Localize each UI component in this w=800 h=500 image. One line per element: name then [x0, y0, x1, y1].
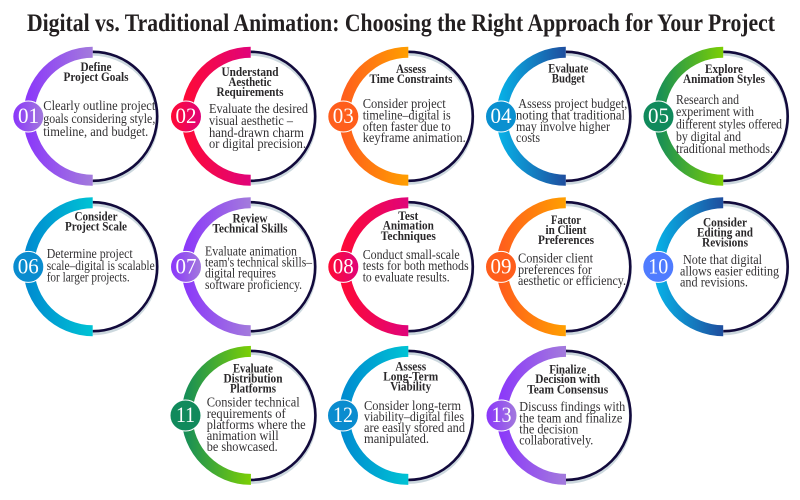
- heading: Finalize: [549, 362, 587, 376]
- body text: [364, 398, 465, 446]
- heading: [65, 210, 128, 234]
- heading: [64, 60, 129, 84]
- body text: Evaluate animation: [205, 244, 297, 259]
- body text: timeline–digital is: [363, 108, 451, 122]
- body text: or digital precision.: [209, 136, 306, 151]
- heading: Evaluate: [548, 62, 589, 76]
- heading: Explore: [705, 62, 744, 76]
- heading: Aesthetic: [228, 75, 272, 89]
- heading: Consider: [703, 216, 748, 230]
- badge 01: 01: [18, 103, 39, 128]
- panel: step 06 project scale: [13, 197, 157, 336]
- body text: hand-drawn charm: [209, 125, 305, 140]
- badge 07: 07: [176, 254, 196, 278]
- body text: the team and finalize: [519, 410, 622, 425]
- heading: Assess: [396, 62, 426, 76]
- panel: step 05 animation styles: [643, 47, 788, 186]
- body text: Evaluate the desired: [209, 101, 308, 116]
- body text: team's technical skills–: [205, 255, 312, 270]
- heading: Define: [80, 60, 112, 74]
- heading: Long-Term: [383, 370, 438, 384]
- badge 06: [13, 251, 44, 282]
- body text: [519, 399, 626, 447]
- badge 06: 06: [18, 254, 39, 278]
- badge 11: 11: [176, 402, 195, 427]
- badge 05: 05: [648, 103, 669, 128]
- heading: [381, 209, 436, 243]
- badge 09: [486, 251, 516, 282]
- body text: Consider long-term: [364, 398, 462, 413]
- body text: platforms where the: [207, 417, 306, 432]
- body text: by digital and: [676, 129, 741, 144]
- badge 07: [170, 251, 202, 282]
- heading: [527, 362, 608, 396]
- badge 04: [486, 101, 516, 132]
- heading: Factor: [551, 213, 582, 227]
- panel: step 04 evaluate budget: [486, 47, 630, 186]
- body text: costs: [516, 130, 540, 145]
- ring: [181, 47, 315, 186]
- body text: Clearly outline project: [43, 98, 156, 113]
- heading: Project Scale: [65, 220, 128, 234]
- heading: Animation: [383, 219, 434, 233]
- body text: visual aesthetic –: [209, 113, 293, 128]
- heading: Understand: [222, 65, 279, 79]
- body text: [207, 395, 306, 454]
- body text: [680, 252, 779, 290]
- body text: allows easier editing: [680, 264, 779, 278]
- body text: scale–digital is scalable: [47, 258, 155, 273]
- body text: the decision: [519, 421, 579, 436]
- body text: are easily stored and: [364, 420, 465, 435]
- body text: experiment with: [676, 104, 754, 119]
- body text: Consider project: [363, 96, 446, 111]
- badge 09: 09: [490, 254, 512, 278]
- badge 02: [170, 101, 202, 132]
- ring: [23, 197, 157, 336]
- body text: Determine project: [47, 246, 133, 261]
- body text: [518, 251, 626, 288]
- body text: often faster due to: [363, 119, 451, 134]
- badge 01: [13, 101, 44, 132]
- badge 03: [328, 101, 359, 132]
- heading: Review: [232, 212, 268, 226]
- panel: step 11 distribution platforms: [170, 346, 315, 485]
- panel: step 12 long-term viability: [328, 346, 473, 485]
- badge 03: 03: [333, 103, 354, 128]
- body text: keyframe animation.: [363, 130, 466, 145]
- panel: step 01 define project goals: [13, 47, 157, 186]
- body text: goals considering style,: [43, 111, 155, 126]
- badge 02: 02: [176, 103, 196, 128]
- body text: [363, 247, 469, 285]
- badge 11: [170, 400, 201, 431]
- body text: requirements of: [207, 406, 286, 421]
- heading: Consider: [74, 210, 118, 224]
- ring: [654, 47, 788, 186]
- body text: Note that digital: [683, 252, 762, 267]
- heading: Test: [398, 209, 418, 223]
- panel: step 13 finalize decision: [486, 346, 630, 485]
- body text: [43, 98, 156, 139]
- heading: [224, 362, 283, 396]
- body text: different styles offered: [676, 116, 782, 132]
- body text: Assess project budget,: [518, 96, 627, 111]
- body text: [363, 96, 466, 145]
- ring: [339, 346, 473, 485]
- panel: step 07 technical skills: [170, 197, 315, 336]
- heading: [370, 62, 453, 86]
- ring: [496, 197, 630, 336]
- ring: [23, 47, 157, 186]
- heading: Techniques: [381, 229, 436, 243]
- heading: Time Constraints: [370, 72, 453, 86]
- body text: manipulated.: [364, 431, 429, 446]
- body text: aesthetic or efficiency.: [518, 273, 626, 288]
- heading: [383, 360, 438, 394]
- body text: for larger projects.: [47, 270, 130, 285]
- body text: may involve higher: [516, 119, 611, 134]
- body text: preferences for: [518, 262, 593, 277]
- ring: [339, 47, 473, 186]
- badge 12: [328, 400, 358, 431]
- body text: to evaluate results.: [363, 270, 450, 285]
- heading: Preferences: [538, 233, 594, 247]
- ring: [654, 197, 788, 336]
- ring: [496, 47, 630, 186]
- body text: Consider technical: [207, 395, 300, 410]
- badge 13: 13: [492, 402, 512, 427]
- body text: and revisions.: [680, 275, 748, 290]
- badge 04: 04: [490, 103, 512, 128]
- heading: Editing and: [697, 226, 753, 240]
- ring: [181, 346, 315, 485]
- badge 12: 12: [333, 402, 353, 427]
- badge 08: [328, 251, 359, 282]
- body text: be showcased.: [207, 439, 278, 454]
- body text: noting that traditional: [516, 108, 625, 122]
- heading: [538, 213, 594, 247]
- badge 10: [643, 251, 674, 282]
- heading: Viability: [390, 380, 431, 394]
- heading: Requirements: [216, 85, 284, 99]
- panel: step 03 time constraints: [328, 47, 473, 186]
- body text: Discuss findings with: [519, 399, 626, 414]
- body text: [47, 246, 155, 285]
- heading: Decision with: [535, 372, 600, 386]
- heading: Distribution: [224, 372, 283, 386]
- badge 05: [643, 101, 674, 132]
- heading: Team Consensus: [527, 382, 608, 396]
- heading: Project Goals: [64, 70, 129, 84]
- heading: Animation Styles: [683, 72, 765, 86]
- ring: [181, 197, 315, 336]
- body text: timeline, and budget.: [43, 124, 148, 139]
- heading: Platforms: [230, 382, 276, 396]
- heading: Budget: [552, 72, 585, 86]
- body text: software proficiency.: [205, 277, 302, 292]
- heading: Assess: [395, 360, 426, 374]
- badge 10: 10: [648, 254, 668, 278]
- heading: [548, 62, 589, 86]
- body text: traditional methods.: [676, 141, 773, 156]
- heading: in Client: [546, 223, 586, 237]
- heading: Evaluate: [233, 362, 274, 376]
- body text: [209, 101, 308, 151]
- heading: [697, 216, 753, 250]
- heading: [216, 65, 284, 99]
- ring: [496, 346, 630, 485]
- body text: tests for both methods: [363, 258, 469, 273]
- heading: Technical Skills: [212, 222, 288, 236]
- body text: animation will: [207, 428, 279, 443]
- body text: [205, 244, 312, 292]
- panel: step 02 aesthetic requirements: [170, 47, 315, 186]
- panel: step 10 editing and revisions: [643, 197, 788, 336]
- body text: Consider client: [518, 251, 593, 266]
- heading: Revisions: [702, 236, 748, 250]
- heading: [212, 212, 288, 236]
- body text: [676, 92, 782, 156]
- panel: step 08 test techniques: [328, 197, 473, 336]
- body text: collaboratively.: [519, 432, 593, 447]
- body text: Conduct small-scale: [363, 247, 460, 262]
- body text: [516, 96, 627, 145]
- badge 13: [486, 400, 517, 431]
- body text: viability–digital files: [364, 409, 464, 424]
- body text: digital requires: [205, 266, 276, 281]
- panel: step 09 client preferences: [486, 197, 630, 336]
- heading: [683, 62, 765, 86]
- ring: [339, 197, 473, 336]
- badge 08: 08: [333, 254, 354, 278]
- body text: Research and: [676, 92, 739, 107]
